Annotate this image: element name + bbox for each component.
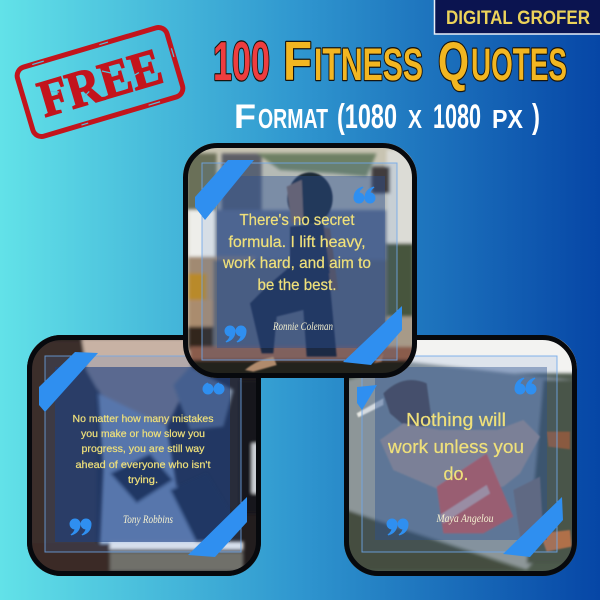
icon: closing quote mark bbox=[224, 326, 246, 342]
signature: Maya Angelou bbox=[436, 511, 494, 525]
subtitle: Format (1080 x 1080 px): F bbox=[234, 98, 256, 136]
quote text: There's no secret bbox=[240, 212, 355, 229]
quote text bbox=[387, 410, 524, 484]
quote text: be the best. bbox=[258, 277, 336, 294]
logo: Digital Grofer bbox=[434, 0, 600, 34]
title: 100 Fitness Quotes: 100 bbox=[213, 30, 270, 92]
corner ribbons bbox=[195, 160, 402, 365]
stamp: FREE: FREE bbox=[32, 38, 169, 129]
title: 100 Fitness Quotes: ITNESS bbox=[314, 39, 423, 90]
icon: opening quote mark bbox=[354, 186, 376, 204]
quote text: work unless you bbox=[387, 437, 524, 457]
subtitle: Format (1080 x 1080 px): 1080 bbox=[433, 98, 481, 136]
quote text: formula. I lift heavy, bbox=[228, 234, 366, 251]
quote text: do. bbox=[444, 464, 468, 484]
card: Maya Angelou quote bbox=[340, 330, 585, 580]
glass panels bbox=[362, 356, 557, 552]
corner ribbons bbox=[39, 352, 247, 557]
subtitle: Format (1080 x 1080 px): PX bbox=[492, 104, 524, 134]
quote text: No matter how many mistakes bbox=[72, 413, 214, 425]
quote text: Nothing will bbox=[406, 410, 506, 430]
title: 100 Fitness Quotes bbox=[213, 30, 567, 92]
corner ribbons bbox=[357, 385, 563, 557]
quote text bbox=[72, 413, 214, 486]
glass panels bbox=[202, 163, 397, 360]
photo: woman lunging in living room bbox=[180, 140, 420, 380]
quote text bbox=[222, 212, 371, 294]
signature: Tony Robbins bbox=[123, 512, 173, 526]
icon: closing quote mark bbox=[386, 518, 408, 536]
photo: man doing sit-ups bbox=[340, 330, 585, 580]
card: Ronnie Coleman quote bbox=[180, 140, 420, 380]
signature: Ronnie Coleman bbox=[272, 319, 333, 333]
subtitle: Format (1080 x 1080 px): (1080 bbox=[337, 98, 397, 136]
glass panels bbox=[45, 356, 241, 552]
title: 100 Fitness Quotes: Q bbox=[438, 30, 469, 92]
quote text: work hard, and aim to bbox=[222, 255, 371, 272]
photo: man holding dumbbells bbox=[20, 330, 265, 580]
quote text: trying. bbox=[128, 474, 158, 486]
quote text: ahead of everyone who isn't bbox=[76, 459, 211, 471]
icon: opening quote mark bbox=[202, 382, 225, 394]
subtitle: Format (1080 x 1080 px): X bbox=[408, 104, 423, 134]
border bbox=[30, 338, 258, 574]
subtitle: Format (1080 x 1080 px): ORMAT bbox=[258, 103, 328, 134]
quote text: you make or how slow you bbox=[81, 428, 205, 440]
subtitle: Format (1080 x 1080 px) bbox=[234, 98, 540, 136]
border bbox=[346, 338, 574, 574]
icon: opening quote mark bbox=[514, 378, 536, 394]
quote text: progress, you are still way bbox=[82, 443, 205, 455]
icon: closing quote mark bbox=[69, 518, 92, 536]
subtitle: Format (1080 x 1080 px): ) bbox=[532, 98, 540, 136]
border bbox=[186, 146, 414, 376]
card: Tony Robbins quote bbox=[20, 330, 265, 580]
title: 100 Fitness Quotes: F bbox=[283, 30, 312, 92]
